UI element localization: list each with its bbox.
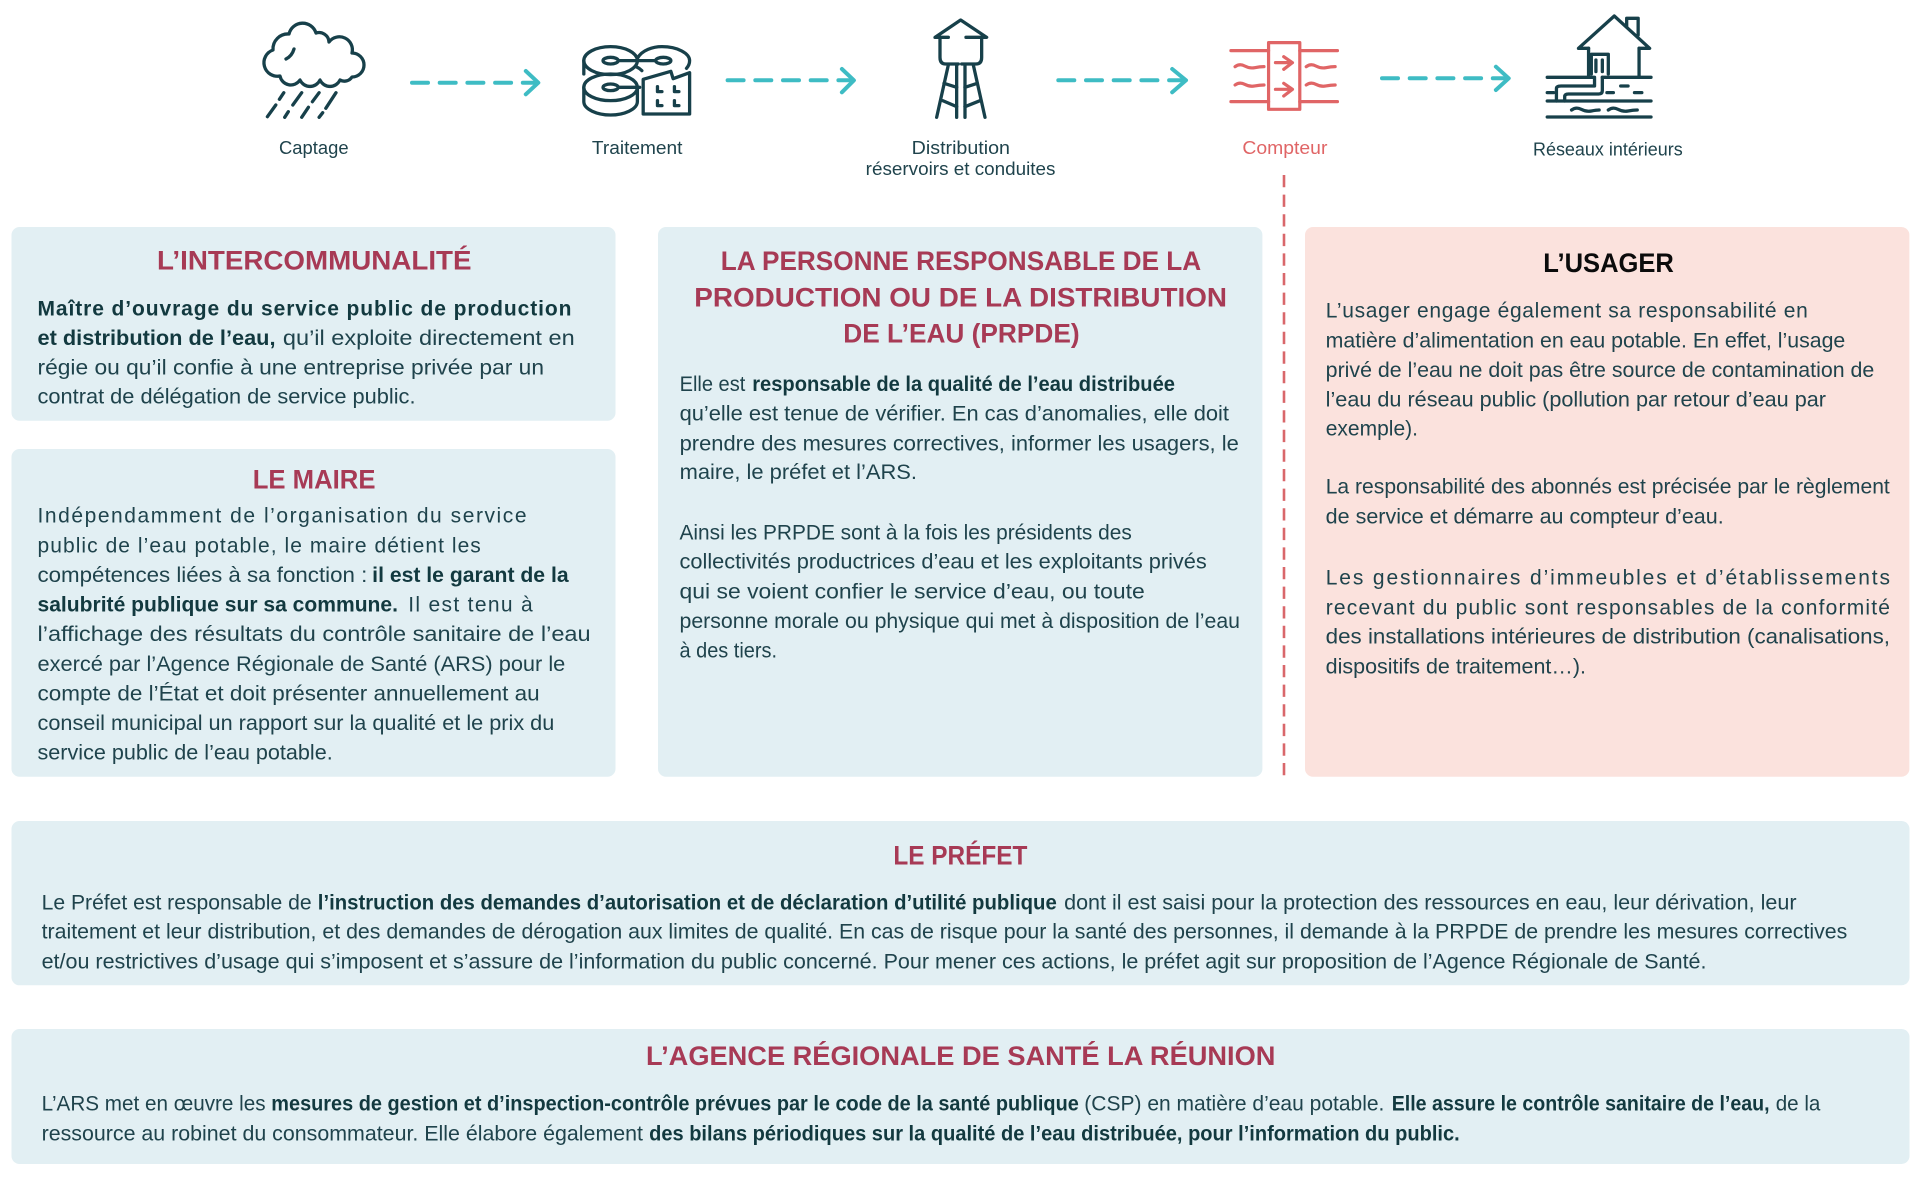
text: usager paragraph 1: exemple). bbox=[1326, 418, 1418, 441]
text: intercommunalité body: régie ou qu’il confie à une entreprise privée par un bbox=[38, 356, 544, 379]
text: intercommunalité body bbox=[38, 298, 575, 408]
heading: le maire: LE MAIRE bbox=[253, 465, 376, 495]
panel: le maire bbox=[12, 449, 616, 777]
caption: Captage: Captage bbox=[279, 138, 349, 158]
panel: PRPDE bbox=[658, 227, 1262, 777]
heading: PRPDE: DE L’EAU (PRPDE) bbox=[843, 318, 1080, 348]
text: PRPDE paragraph 1: responsable de la qualité de l’eau distribuée bbox=[752, 373, 1175, 396]
icon: water meter (Compteur) bbox=[1231, 43, 1337, 109]
heading: agence régionale de santé: L’AGENCE RÉGIONALE DE SANTÉ LA RÉUNION bbox=[646, 1040, 1275, 1071]
text: préfet body: dont il est saisi pour la protection des ressources en eau, leur dérivation, leur bbox=[1064, 891, 1797, 914]
panel: l'intercommunalité bbox=[12, 227, 616, 421]
text: PRPDE paragraph 2: Ainsi les PRPDE sont à la fois les présidents des bbox=[680, 521, 1132, 544]
caption: Compteur: Compteur bbox=[1242, 138, 1327, 158]
text: maire body: compétences liées à sa fonction : bbox=[38, 564, 367, 587]
heading: l'intercommunalité: L’INTERCOMMUNALITÉ bbox=[157, 244, 472, 275]
text: PRPDE paragraph 1: maire, le préfet et l’ARS. bbox=[680, 461, 917, 484]
text: usager paragraph 3 bbox=[1326, 567, 1890, 678]
text: maire body: compte de l’État et doit présenter annuellement au bbox=[38, 682, 540, 706]
text: préfet body: et/ou restrictives d’usage qui s’imposent et s’assure de l’information du public concerné. Pour mener ces actions, le préfet agit sur proposition de l’Agence Régionale de Santé. bbox=[42, 951, 1707, 974]
text: préfet body: Le Préfet est responsable de bbox=[42, 891, 312, 914]
panel: l'usager bbox=[1305, 227, 1909, 777]
text: usager paragraph 1: l’eau du réseau public (pollution par retour d’eau par bbox=[1326, 389, 1826, 412]
text: PRPDE paragraph 2: qui se voient confier le service d’eau, ou toute bbox=[680, 580, 1145, 603]
text: PRPDE paragraph 1 bbox=[680, 373, 1239, 484]
text: usager paragraph 2 bbox=[1326, 476, 1890, 529]
caption: Distribution, réservoirs et conduites: Distribution bbox=[912, 138, 1010, 158]
text: usager paragraph 1 bbox=[1326, 300, 1874, 441]
icon: rain cloud (Captage) bbox=[264, 23, 364, 117]
icon: water tower (Distribution) bbox=[935, 20, 987, 117]
text: ARS body: Elle assure le contrôle sanitaire de l’eau, bbox=[1392, 1093, 1770, 1116]
text: ARS body: mesures de gestion et d’inspection-contrôle prévues par le code de la santé publique bbox=[271, 1093, 1079, 1116]
arrow: distribution to compteur bbox=[1058, 69, 1186, 92]
text: PRPDE paragraph 1: prendre des mesures correctives, informer les usagers, le bbox=[680, 432, 1239, 455]
text: usager paragraph 1: privé de l’eau ne doit pas être source de contamination de bbox=[1326, 359, 1874, 382]
arrow: captage to traitement bbox=[412, 71, 538, 94]
text: maire body: Indépendamment de l’organisation du service bbox=[38, 505, 526, 528]
text: maire body: conseil municipal un rapport sur la qualité et le prix du bbox=[38, 712, 554, 735]
caption: Traitement: Traitement bbox=[592, 138, 682, 158]
icon: house with indoor pipes (Réseaux intérieurs) bbox=[1547, 16, 1651, 117]
text: préfet body: traitement et leur distribution, et des demandes de dérogation aux limites de qualité. En cas de risque pour la santé des personnes, il demande à la PRPDE de prendre les mesures correctives bbox=[42, 920, 1847, 943]
text: usager paragraph 3: des installations intérieures de distribution (canalisations, bbox=[1326, 626, 1890, 649]
caption: Distribution, réservoirs et conduites: réservoirs et conduites bbox=[866, 159, 1056, 179]
text: usager paragraph 1: L’usager engage également sa responsabilité en bbox=[1326, 300, 1808, 323]
text: intercommunalité body: qu’il exploite directement en bbox=[283, 327, 575, 350]
text: PRPDE paragraph 1: qu’elle est tenue de vérifier. En cas d’anomalies, elle doit bbox=[680, 403, 1229, 426]
text: usager paragraph 3: recevant du public sont responsables de la conformité bbox=[1326, 596, 1890, 619]
arrow: traitement to distribution bbox=[728, 69, 854, 92]
text: ARS body: ressource au robinet du consommateur. Elle élabore également bbox=[42, 1123, 643, 1146]
text: usager paragraph 3: Les gestionnaires d’immeubles et d’établissements bbox=[1326, 567, 1890, 590]
text: intercommunalité body: et distribution de l’eau, bbox=[38, 327, 276, 350]
text: ARS body: (CSP) en matière d’eau potable. bbox=[1084, 1093, 1384, 1116]
text: maire body: service public de l’eau potable. bbox=[38, 742, 333, 765]
text: maire body bbox=[38, 505, 591, 765]
text: intercommunalité body: contrat de délégation de service public. bbox=[38, 385, 416, 408]
text: maire body: salubrité publique sur sa commune. bbox=[38, 594, 398, 617]
text: préfet body bbox=[42, 891, 1847, 974]
panel: le préfet bbox=[12, 821, 1910, 985]
heading: PRPDE: PRODUCTION OU DE LA DISTRIBUTION bbox=[694, 282, 1227, 312]
text: ARS body: des bilans périodiques sur la qualité de l’eau distribuée, pour l’information du public. bbox=[649, 1123, 1460, 1146]
heading: PRPDE bbox=[694, 246, 1227, 348]
text: usager paragraph 2: de service et démarre au compteur d’eau. bbox=[1326, 506, 1724, 529]
text: PRPDE paragraph 2: personne morale ou physique qui met à disposition de l’eau bbox=[680, 610, 1240, 633]
text: maire body: public de l’eau potable, le maire détient les bbox=[38, 534, 481, 557]
text: maire body: l’affichage des résultats du contrôle sanitaire de l’eau bbox=[38, 623, 591, 646]
text: PRPDE paragraph 2: collectivités productrices d’eau et les exploitants privés bbox=[680, 551, 1207, 574]
caption: Réseaux intérieurs: Réseaux intérieurs bbox=[1533, 140, 1683, 160]
divider: compteur limit dashed line bbox=[1283, 175, 1285, 777]
icon: treatment tanks and factory (Traitement) bbox=[584, 47, 690, 115]
text: intercommunalité body: Maître d’ouvrage du service public de production bbox=[38, 298, 571, 321]
heading: le préfet: LE PRÉFET bbox=[893, 840, 1028, 871]
heading: l'usager: L’USAGER bbox=[1543, 248, 1674, 278]
text: maire body: il est le garant de la bbox=[372, 564, 569, 587]
arrow: compteur to réseaux intérieurs bbox=[1382, 67, 1509, 90]
text: maire body: exercé par l’Agence Régionale de Santé (ARS) pour le bbox=[38, 653, 565, 676]
text: usager paragraph 3: dispositifs de traitement…). bbox=[1326, 655, 1586, 678]
text: PRPDE paragraph 2 bbox=[680, 521, 1240, 663]
text: ARS body bbox=[42, 1093, 1821, 1146]
text: usager paragraph 2: La responsabilité des abonnés est précisée par le règlement bbox=[1326, 476, 1890, 499]
text: maire body: Il est tenu à bbox=[408, 594, 533, 617]
text: PRPDE paragraph 2: à des tiers. bbox=[680, 640, 777, 663]
text: ARS body: de la bbox=[1776, 1093, 1821, 1116]
panel: agence régionale de santé bbox=[12, 1029, 1910, 1164]
text: préfet body: l’instruction des demandes d’autorisation et de déclaration d’utilité publique bbox=[318, 891, 1057, 914]
text: ARS body: L’ARS met en œuvre les bbox=[42, 1093, 266, 1116]
heading: PRPDE: LA PERSONNE RESPONSABLE DE LA bbox=[721, 246, 1201, 276]
text: PRPDE paragraph 1: Elle est bbox=[680, 373, 745, 396]
text: usager paragraph 1: matière d’alimentation en eau potable. En effet, l’usage bbox=[1326, 329, 1845, 352]
caption: Distribution, réservoirs et conduites bbox=[866, 138, 1056, 179]
